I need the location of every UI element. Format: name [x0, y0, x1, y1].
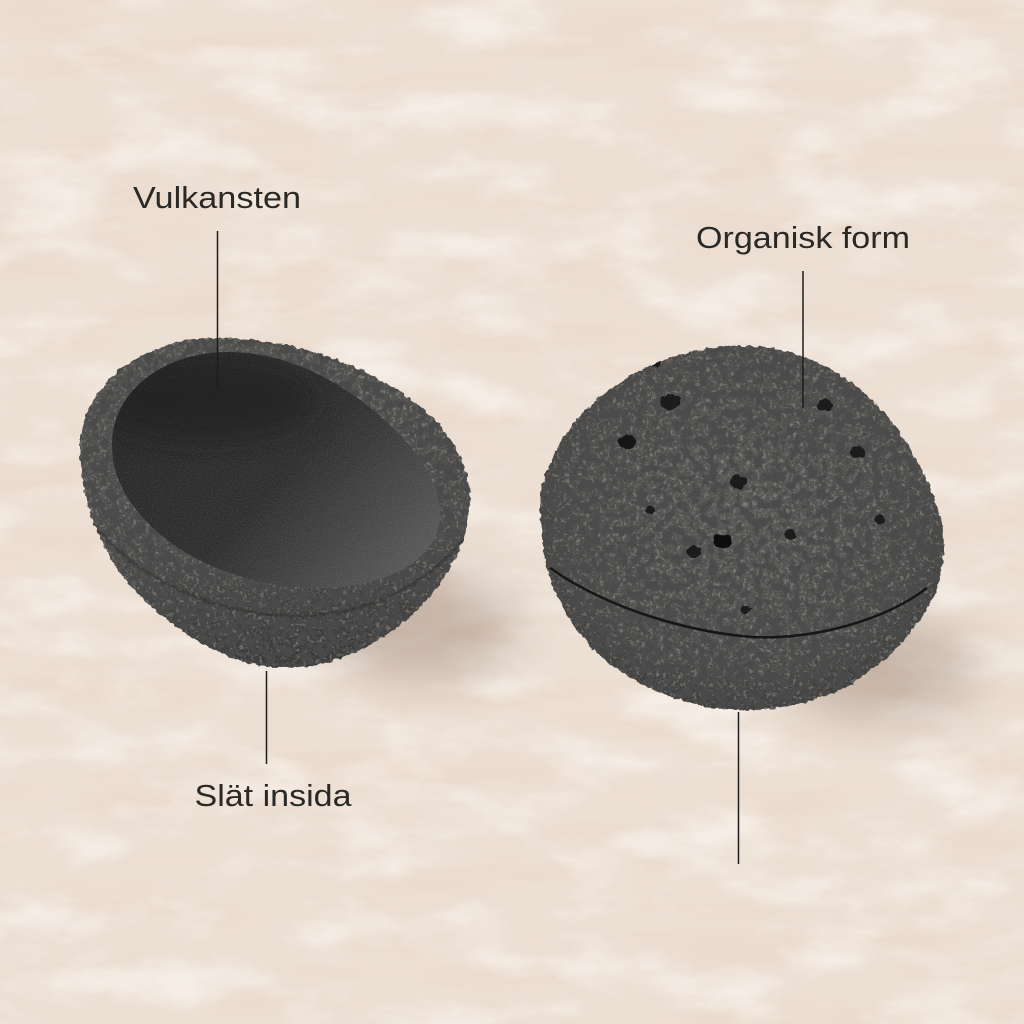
bowl shadow: [320, 570, 520, 680]
callout line: sphere base: [738, 712, 740, 864]
callout: Organisk form: Organisk form: [696, 220, 910, 255]
ball shadow: [780, 620, 980, 720]
right stone: closed sphere: [535, 340, 950, 715]
callout: Slät insida: Slät insida: [194, 778, 352, 813]
callout: Vulkansten: Vulkansten: [133, 180, 301, 215]
sphere seam: [550, 568, 927, 637]
sphere surface: [535, 340, 950, 715]
bowl outer surface: [70, 330, 480, 675]
bowl smooth interior: [112, 352, 440, 588]
left stone: open bowl: [70, 330, 480, 675]
